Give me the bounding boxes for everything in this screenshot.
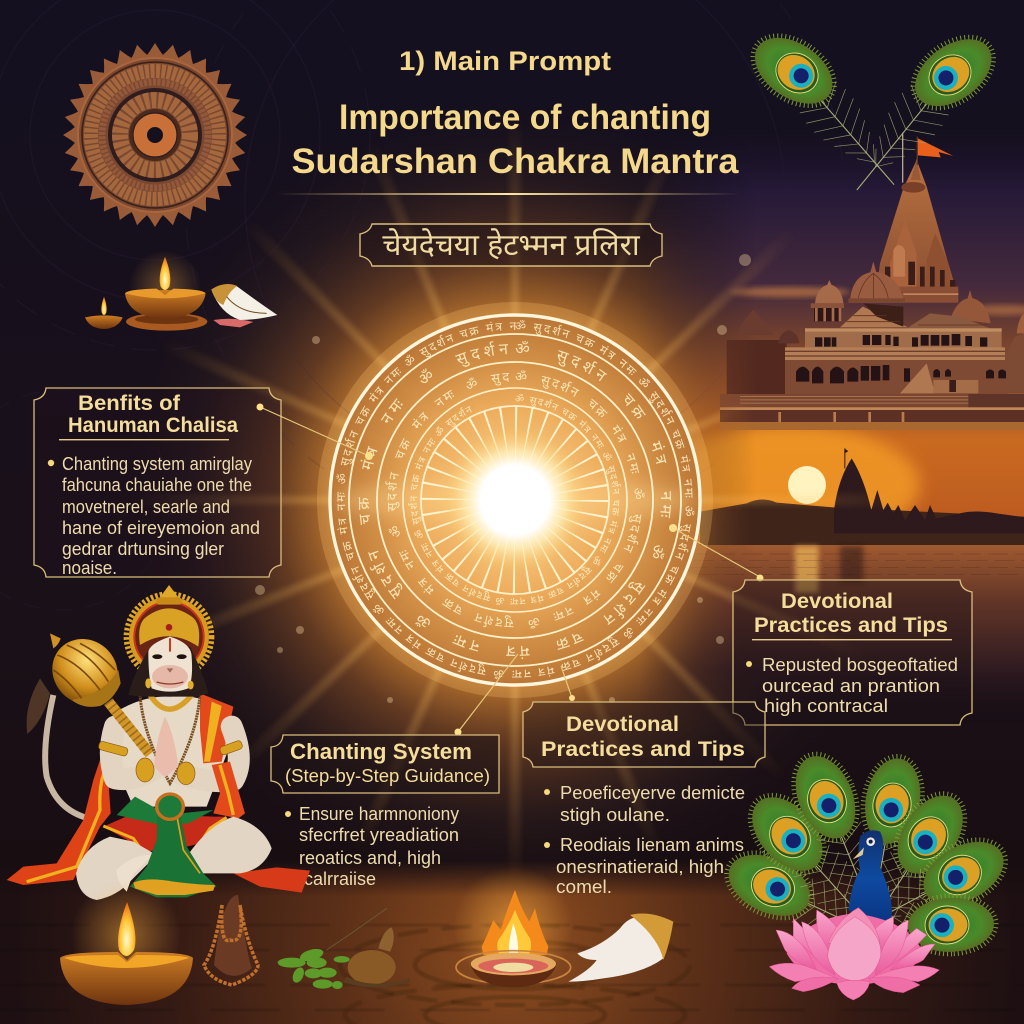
panel: devotional practices middle: Devotional	[566, 713, 679, 736]
panel body: Peoeficeyerve demicte	[560, 783, 745, 803]
panel body: Ensure harmnoniony	[299, 804, 459, 824]
tail	[27, 678, 88, 818]
hanuman figure	[7, 585, 310, 900]
river	[650, 545, 1024, 700]
panel body: Reodiais Iienam anims	[560, 835, 744, 855]
big diya bottom left	[60, 880, 193, 1005]
panel body: stigh oulane.	[560, 805, 670, 825]
panel body: movetnerel, searle and	[62, 497, 230, 517]
peacock body	[848, 830, 892, 927]
armbands	[98, 740, 243, 757]
panel body: onesrinatieraid, high	[556, 857, 724, 877]
sunset sky, sun and river	[650, 154, 1024, 700]
panel body: Chanting system amirglay	[62, 454, 252, 474]
panel heading	[754, 590, 948, 637]
green waist band	[117, 797, 213, 824]
left wing	[727, 309, 799, 397]
panel heading: Devotional	[781, 590, 893, 613]
chakra disc	[317, 302, 713, 698]
shoulder sash	[200, 693, 233, 763]
arms	[111, 727, 239, 781]
panel body: sfecrfret yreadiation	[299, 825, 459, 845]
panel body: hane of eireyemoion and	[62, 518, 260, 538]
saffron flag	[917, 137, 953, 165]
red dhoti	[103, 813, 227, 852]
panel heading: Benfits of	[78, 392, 181, 415]
chakra mantra text rings	[336, 320, 695, 680]
panel: devotional practices right	[733, 580, 972, 725]
panel body: reoatics and, high	[299, 848, 441, 868]
panel: chanting system: Chanting System	[290, 739, 472, 764]
rangoli floor ornament	[340, 925, 690, 1024]
panel heading	[68, 392, 238, 437]
panel: devotional practices middle: Practices and Tips	[541, 738, 745, 761]
upper storey	[805, 328, 1002, 348]
panel: benefits	[34, 388, 281, 578]
panel: chanting system	[271, 735, 499, 889]
panel body: gedrar drtunsing gler	[62, 539, 224, 559]
wooden floor	[0, 860, 1024, 1024]
mace	[39, 625, 150, 754]
connector: devotional middle	[561, 666, 575, 701]
legs	[76, 817, 272, 900]
chakra mantra text rings: ॐ सुदर्शन चक्र मंत्र नमः ॐ सुदर्शन चक्र मंत्र नमः ॐ सुदर्शन चक्र मंत्र नमः ॐ सुदर्शन चक्र मंत्र नमः ॐ सुदर्शन चक्र मंत्र नमः ॐ सुदर्शन	[385, 370, 645, 629]
ground storey	[785, 360, 1008, 394]
panel heading: Practices and Tips	[754, 614, 948, 637]
right wing	[1005, 313, 1024, 393]
conch shell bottom	[568, 913, 673, 982]
panel body: high contracal	[764, 696, 888, 716]
roofs	[840, 304, 990, 328]
right lower cloth	[233, 867, 310, 893]
far shore and temple silhouette	[650, 448, 1024, 700]
torso	[110, 696, 233, 807]
arm cloth right	[212, 762, 245, 818]
chakra mantra text rings: ॐ सुदर्शन चक्र मंत्र नमः ॐ सुदर्शन चक्र मंत्र नमः ॐ सुदर्शन चक्र मंत्र नमः ॐ सुदर्शन चक्र मंत्र नमः ॐ सुदर्शन चक्र मंत्र नमः ॐ सुदर्शन चक्र मंत्र नमः ॐ सुदर्शन चक्र मंत्र नमः ॐ सुदर्शन चक्र मंत्र नमः ॐ सुदर्शन	[336, 320, 695, 680]
heading: main prompt: 1) Main Prompt	[399, 46, 611, 76]
leaves and coconut offering	[278, 908, 410, 989]
setting sun	[788, 466, 826, 504]
peacock feathers top right	[740, 22, 1007, 206]
peacock fan feathers	[716, 745, 1017, 978]
halo	[126, 594, 212, 679]
title underline	[275, 193, 741, 195]
panel body	[62, 454, 260, 578]
title: Sudarshan Chakra Mantra	[292, 142, 739, 181]
temple complex	[720, 133, 1024, 430]
panel body	[556, 783, 745, 897]
panel: chanting system: (Step-by-Step Guidance)	[285, 766, 490, 786]
necklaces	[140, 695, 200, 783]
panel body: ourcead an prantion	[762, 676, 940, 696]
panel body: Repusted bosgeoftatied	[762, 655, 958, 675]
lower terrace	[720, 407, 1024, 430]
panel: devotional practices middle	[523, 702, 765, 897]
flag pole	[902, 133, 903, 183]
panel body: fahcuna chauiahe one the	[62, 475, 252, 495]
devanagari banner: चेयदेचया हेटभ्मन प्रलिरा	[382, 228, 641, 262]
face	[148, 637, 192, 692]
main spire	[877, 158, 958, 303]
title	[292, 98, 739, 181]
diya and conch top left	[85, 250, 277, 331]
connector: chanting	[454, 654, 518, 736]
connector: benefits	[256, 404, 373, 460]
hair	[128, 647, 208, 697]
sun rays	[125, 110, 905, 890]
left lower cloth	[7, 760, 127, 885]
chakra mantra text rings: ॐ सुदर्शन चक्र मंत्र नमः ॐ सुदर्शन चक्र मंत्र नमः ॐ सुदर्शन चक्र मंत्र नमः ॐ सुदर्शन चक्र मंत्र नमः ॐ सुदर्शन चक्र मंत्र नमः ॐ सुदर्शन	[408, 394, 621, 605]
middle cornice	[785, 347, 1005, 360]
panel body	[762, 655, 958, 716]
hanging green sash	[130, 794, 217, 897]
domes	[811, 262, 991, 323]
sacred fire bowl	[453, 867, 573, 987]
rudraksha beads	[204, 895, 258, 985]
crown	[139, 585, 199, 647]
chakra core glow	[443, 428, 587, 572]
panel heading: Hanuman Chalisa	[68, 414, 238, 437]
panel body: calrraiise	[304, 869, 376, 889]
sparkles	[255, 254, 751, 703]
bracelets	[136, 758, 195, 785]
steps	[720, 394, 1024, 407]
chakra rings	[330, 315, 700, 685]
connector: devotional right	[669, 524, 764, 582]
joined hands	[154, 717, 178, 777]
devanagari banner	[360, 224, 662, 266]
lotus flower	[769, 908, 939, 1000]
panel body: comel.	[556, 877, 612, 897]
earrings	[145, 678, 194, 689]
panel body: noaise.	[62, 558, 117, 578]
title: Importance of chanting	[339, 98, 711, 137]
ornamental mandala	[46, 26, 264, 244]
panel body	[299, 804, 459, 889]
chakra spokes	[451, 436, 579, 564]
